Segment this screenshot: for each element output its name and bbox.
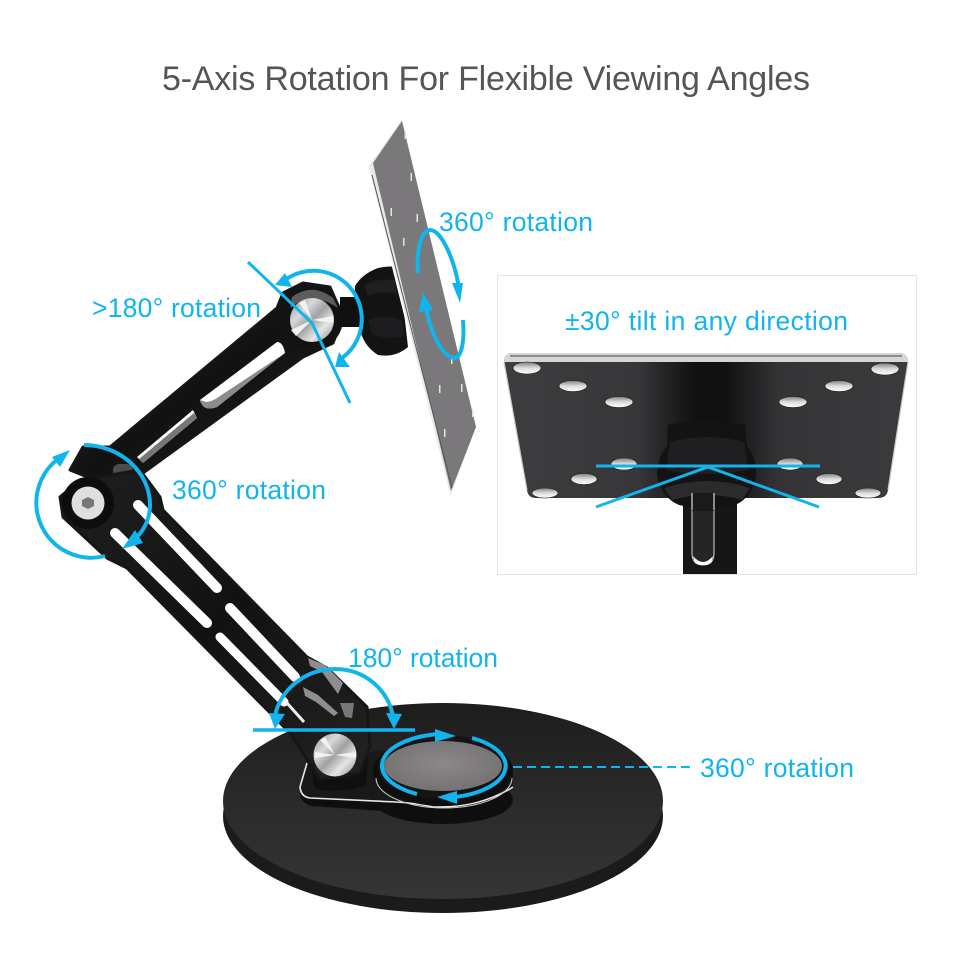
title: 5-Axis Rotation For Flexible Viewing Angles: [162, 60, 810, 98]
annotation: plate 360 rotation arrows: [418, 230, 463, 358]
annotation: swivel 360 rotation arrows: [382, 729, 506, 804]
product: lower arm: [60, 470, 370, 780]
annotation: top joint over 180 rotation arrows: [248, 262, 362, 403]
product: mounting plate side view: [368, 120, 476, 497]
product: base pivot pin: [314, 734, 356, 776]
label: base joint rotation: 180° rotation: [348, 643, 498, 673]
inset: ball knob: [657, 420, 756, 511]
label: elbow rotation: 360° rotation: [172, 475, 326, 505]
label: top joint rotation: >180° rotation: [92, 293, 261, 323]
inset: plate back view: [504, 353, 908, 498]
product: upper arm: [70, 283, 360, 490]
product: swivel puck and bracket: [300, 735, 513, 824]
product: round base: [223, 703, 663, 913]
inset: tilt angle lines: [596, 466, 820, 507]
inset: arm stub: [683, 495, 737, 574]
label: plate rotation: 360° rotation: [439, 207, 593, 237]
product: elbow bolt: [62, 477, 114, 529]
callout line: swivel: [513, 766, 690, 768]
product: ball knob: [355, 266, 408, 356]
label: swivel rotation: 360° rotation: [700, 753, 854, 783]
annotation: base joint 180 rotation arc: [253, 669, 415, 730]
panel: tilt inset: [498, 276, 916, 574]
annotation: elbow 360 rotation arrows: [36, 445, 150, 558]
product: top joint disc: [290, 298, 334, 342]
label: tilt: ±30° tilt in any direction: [565, 306, 848, 336]
